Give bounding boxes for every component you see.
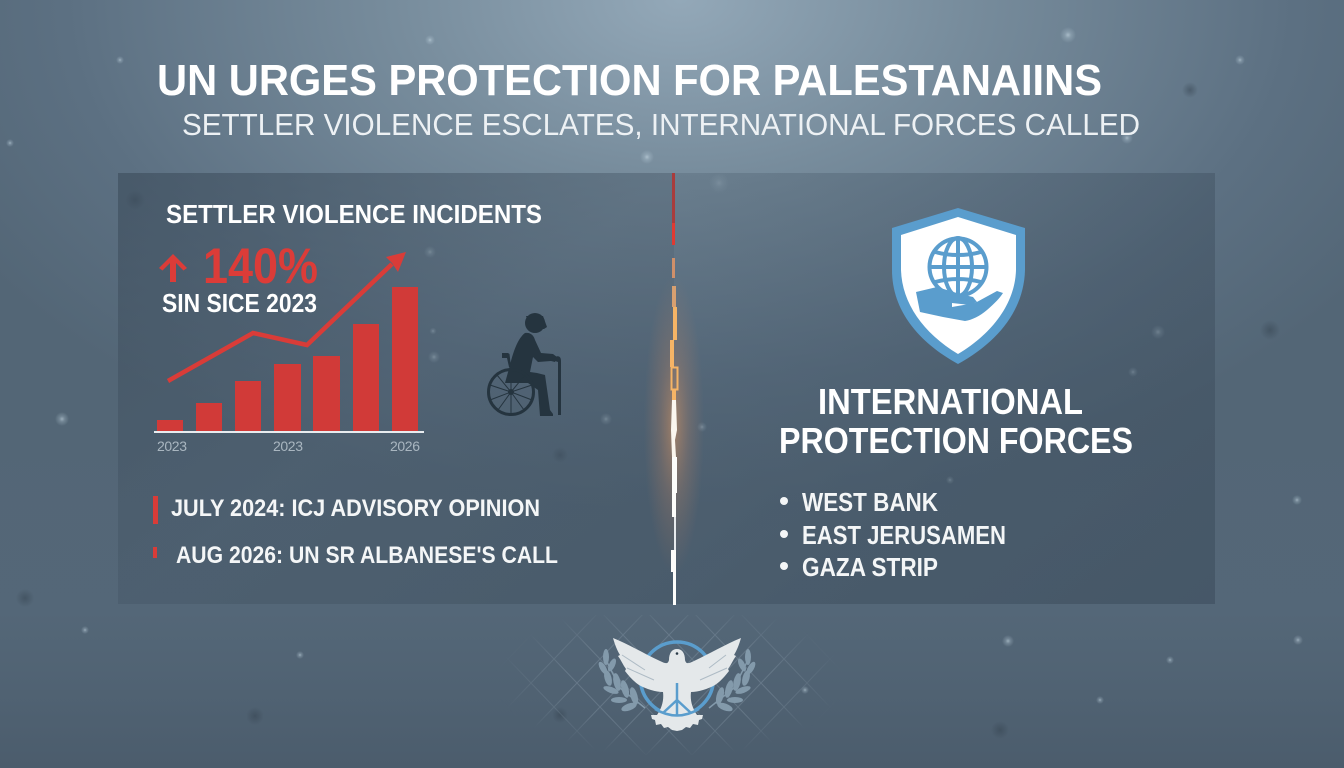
heading: international protection forces <box>779 381 1133 461</box>
ring <box>640 642 714 715</box>
trend arrow <box>168 252 406 381</box>
bar chart <box>154 287 424 454</box>
bar chart: 2023 <box>273 438 303 454</box>
wing feather lines <box>622 655 727 680</box>
icon: shield with globe and hand <box>892 208 1025 364</box>
laurel branches <box>597 649 757 713</box>
heading: settler violence incidents: SETTLER VIOLENCE INCIDENTS <box>166 199 542 229</box>
panel: comparison backdrop <box>118 173 1215 604</box>
heading: international protection forces: PROTECTION FORCES <box>779 420 1133 461</box>
divider: cracking spark <box>644 173 704 605</box>
icon: up arrow <box>159 254 187 282</box>
bar chart: 2026 <box>390 438 420 454</box>
title: UN URGES PROTECTION FOR PALESTANAIINS <box>157 56 1102 105</box>
eye <box>676 652 678 655</box>
subtitle: SETTLER VIOLENCE ESCLATES, INTERNATIONAL FORCES CALLED <box>182 107 1140 142</box>
dove <box>613 638 741 731</box>
panel: settler violence <box>153 199 561 569</box>
list: regions: GAZA STRIP <box>802 552 938 582</box>
emblem: peace dove <box>597 638 757 731</box>
list: regions: WEST BANK <box>802 487 938 517</box>
heading: international protection forces: INTERNATIONAL <box>818 381 1083 422</box>
peace sign <box>655 683 699 716</box>
timeline: ICJ advisory opinion: JULY 2024: ICJ ADVISORY OPINION <box>171 495 540 522</box>
panel: international protection <box>779 208 1133 582</box>
list: regions <box>780 487 1006 582</box>
bar chart: 2023 <box>157 438 187 454</box>
stat: 140 percent: 140% <box>203 238 318 294</box>
icon: person in wheelchair <box>488 313 561 416</box>
list: regions: EAST JERUSAMEN <box>802 520 1006 550</box>
timeline: Albanese call: AUG 2026: UN SR ALBANESE'S CALL <box>176 542 558 569</box>
lattice backdrop <box>524 616 814 746</box>
stat caption: SIN SICE 2023 <box>162 288 317 318</box>
